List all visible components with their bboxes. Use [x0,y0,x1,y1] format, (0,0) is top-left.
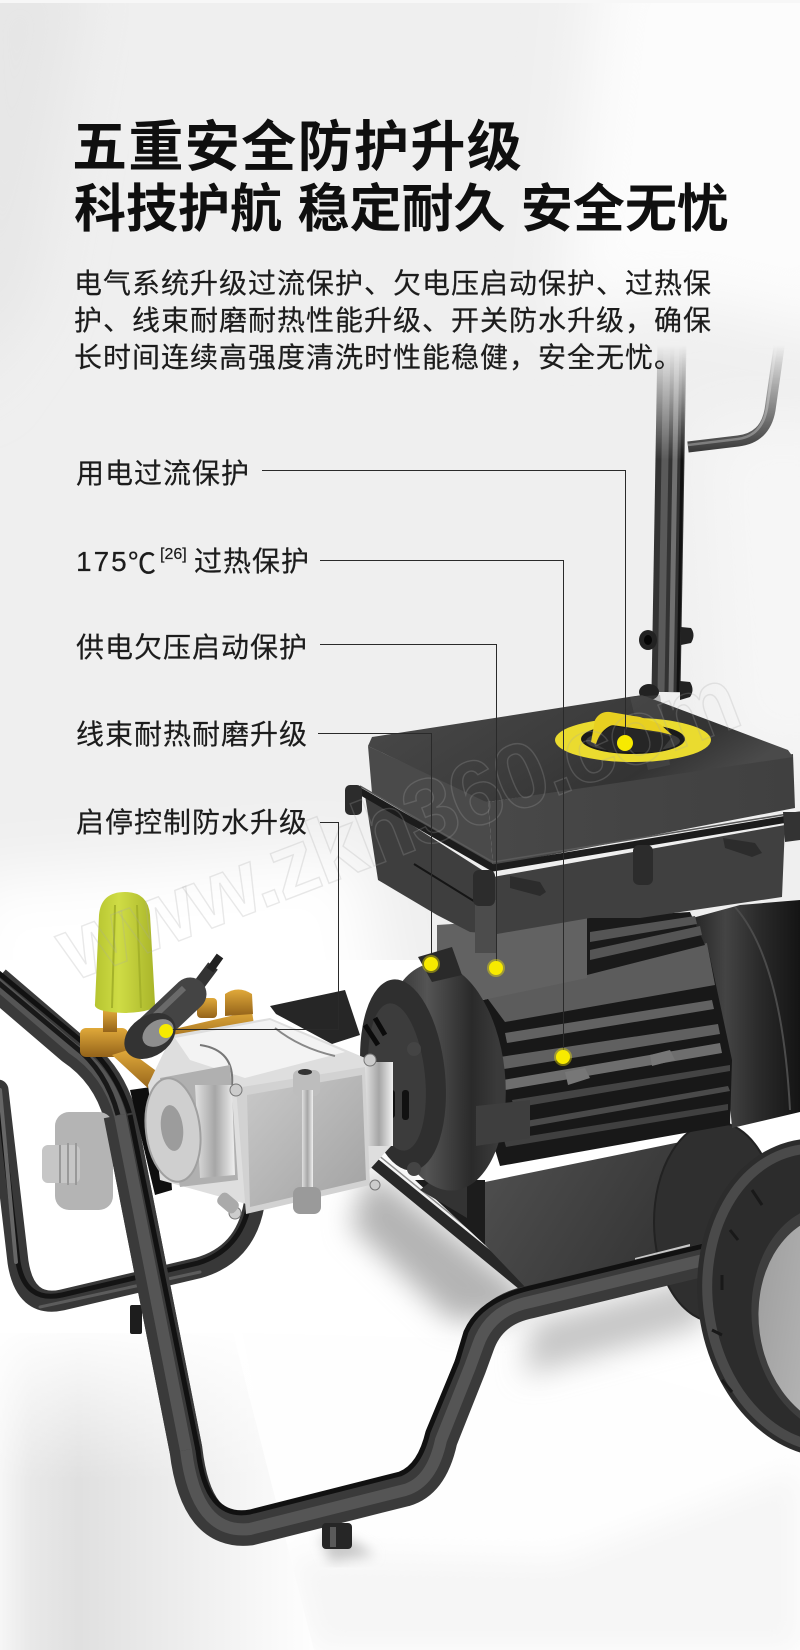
motor fins [480,943,732,1166]
pump rear block [130,1085,172,1195]
label: overheat protection: ℃ [128,542,157,582]
description paragraph: 电气系统升级过流保护、欠电压启动保护、过热保 [74,268,712,298]
floor shadows [320,1170,705,1562]
label: overheat protection: [26] [160,546,187,563]
title line 1: 五重安全防护升级 [72,116,523,178]
back frame tube [0,1090,254,1307]
handle bolts [639,627,694,700]
title line 2: 科技护航 稳定耐久 安全无忧 [74,181,729,239]
label: overcurrent protection: 用电过流保护 [76,458,250,489]
pump cover plate [215,1054,380,1219]
wheel shadow disc [654,1122,778,1322]
label: overheat protection [76,542,310,582]
motor bell housing [351,947,530,1197]
label: waterproof switch: 启停控制防水升级 [76,807,308,838]
strut under motor [362,1150,535,1294]
pump inlet fitting [42,1112,113,1210]
rotary switch [555,712,711,762]
terminal box block [437,912,705,1000]
description paragraph: 长时间连续高强度清洗时性能稳健，安全无忧。 [74,342,683,372]
fan cover [685,900,800,1128]
redraw tube over inlet [120,1115,198,1450]
front frame tube [0,970,720,1529]
wheel [677,1122,800,1474]
control box screws and tabs [345,785,800,906]
front foot [322,1523,352,1549]
label: overheat protection: 175 [76,546,129,577]
pressure switch [116,956,220,1068]
yellow-green cap [95,892,155,1013]
description paragraph [74,268,712,372]
pump dark bracket [270,990,360,1044]
pump body [140,1018,393,1205]
watermark: www.zkh360.com [42,647,753,1001]
brass manifold [80,990,254,1090]
label: undervoltage protection: 供电欠压启动保护 [76,632,308,663]
control box lower body [365,795,785,953]
description paragraph: 护、线束耐磨耐热性能升级、开关防水升级，确保 [74,304,712,336]
base panel [485,1140,720,1290]
label: overheat protection: 过热保护 [194,546,310,577]
handle tubes [661,340,780,692]
label: wiring upgrade: 线束耐热耐磨升级 [76,719,308,750]
control box lid [358,695,800,868]
frame leg foot [130,1305,142,1334]
